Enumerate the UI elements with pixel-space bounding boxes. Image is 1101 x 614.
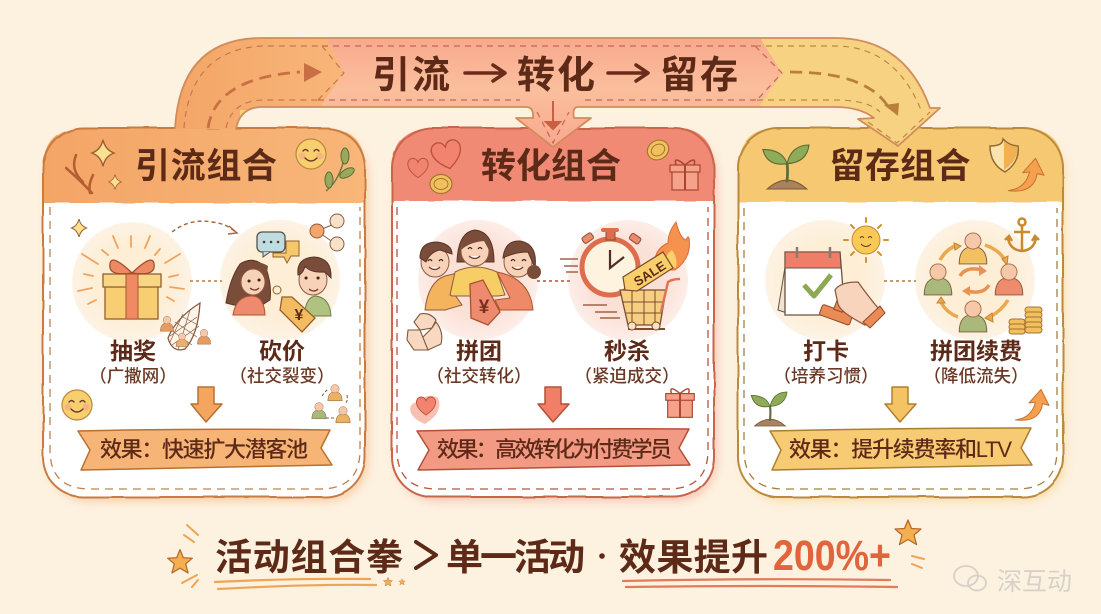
process arrow ribbon (174, 37, 941, 148)
icon: sun (844, 218, 888, 262)
icon: joined hands (407, 314, 442, 350)
process title: 转化 (517, 55, 595, 97)
heading: 转化组合 (481, 147, 621, 186)
process title: 留存 (660, 55, 738, 97)
sublabel: 培养习惯: （培养习惯） (774, 366, 878, 386)
dotted connector (884, 280, 916, 282)
icon: anchor (1005, 218, 1039, 251)
panel card and header band (392, 128, 714, 497)
price tag symbol: ¥ (295, 307, 304, 324)
ribbon outline (175, 38, 940, 147)
effect text: 效果：快速扩大潜客池 (100, 437, 308, 462)
effect banner (770, 428, 1032, 470)
ribbon fill sections (176, 38, 938, 146)
icon: share network (310, 214, 344, 251)
underlines (215, 579, 897, 589)
panel card and header band (738, 128, 1063, 497)
icon: coin stack (1009, 307, 1042, 334)
circle: check-in calendar (765, 220, 885, 340)
circle: group-buy family (418, 220, 541, 340)
star decorations (168, 520, 924, 587)
icon: growth arrow (1015, 389, 1049, 420)
down arrow (885, 387, 916, 422)
icon: people loop (312, 385, 350, 423)
dotted connector (537, 280, 570, 282)
circle: lottery gift (72, 222, 192, 342)
label: 秒杀: 秒杀 (604, 338, 650, 364)
bottom slogan (168, 520, 924, 589)
panel: 转化组合 (392, 128, 718, 502)
dotted connector (190, 280, 222, 282)
circle: retention cycle (915, 220, 1035, 340)
sublabel: 广撒网: （广撒网） (89, 366, 177, 386)
circle: flash sale (560, 220, 689, 340)
panel card and header band (43, 128, 365, 497)
process title: 引流 (372, 55, 450, 97)
process title (372, 55, 738, 97)
sublabel: 降低流失: （降低流失） (924, 366, 1028, 386)
header decorations (763, 139, 1044, 191)
separator dot (599, 553, 605, 559)
right inner dashed arrow (790, 72, 899, 116)
sublabel: 紧迫成交: （紧迫成交） (574, 366, 680, 386)
highlight 200%+: 200%+ (773, 532, 891, 580)
effect text: 效果：高效转化为付费学员 (437, 437, 672, 462)
label: 抽奖: 抽奖 (110, 338, 156, 364)
dashed arrow between circles (172, 221, 237, 234)
watermark (954, 566, 1072, 596)
slogan right: 效果提升 (619, 537, 768, 578)
down arrow (191, 387, 222, 422)
label: 拼团: 拼团 (456, 338, 502, 364)
heading: 留存组合 (830, 147, 970, 186)
icon: wechat (954, 566, 986, 590)
ribbon stitching (184, 46, 930, 143)
label: 拼团续费: 拼团续费 (930, 338, 1022, 364)
icon: heart sticker (410, 396, 439, 424)
slogan middle: 单一活动 (446, 537, 585, 578)
label: 打卡: 打卡 (803, 338, 849, 364)
slogan left: 活动组合拳 (215, 537, 403, 578)
down arrow (538, 387, 569, 422)
left inner dashed arrow (208, 63, 322, 128)
greater-than sign (416, 542, 436, 568)
price tag symbol: ¥ (479, 297, 490, 318)
effect banner (417, 429, 690, 470)
panel: 留存组合 (738, 128, 1066, 502)
heading: 引流组合 (135, 147, 277, 186)
icon: sprout (751, 392, 787, 426)
effect banner (78, 429, 332, 470)
header decorations (66, 139, 356, 193)
icon: net (160, 303, 211, 350)
sublabel: 社交裂变: （社交裂变） (230, 366, 334, 386)
sublabel: 社交转化: （社交转化） (426, 366, 532, 386)
icon: smile (62, 390, 92, 420)
label: 砍价: 砍价 (259, 338, 305, 364)
watermark text: 深互动 (997, 568, 1072, 596)
header decorations (408, 136, 700, 194)
icon: sparkle (72, 219, 86, 237)
icon: gift (666, 389, 694, 417)
effect text: 效果：提升续费率和LTV (789, 437, 1012, 462)
panel: 引流组合 (43, 128, 369, 502)
sale tag text: SALE (631, 258, 669, 289)
circle: bargaining people (220, 220, 340, 340)
center small down arrow (546, 101, 560, 129)
